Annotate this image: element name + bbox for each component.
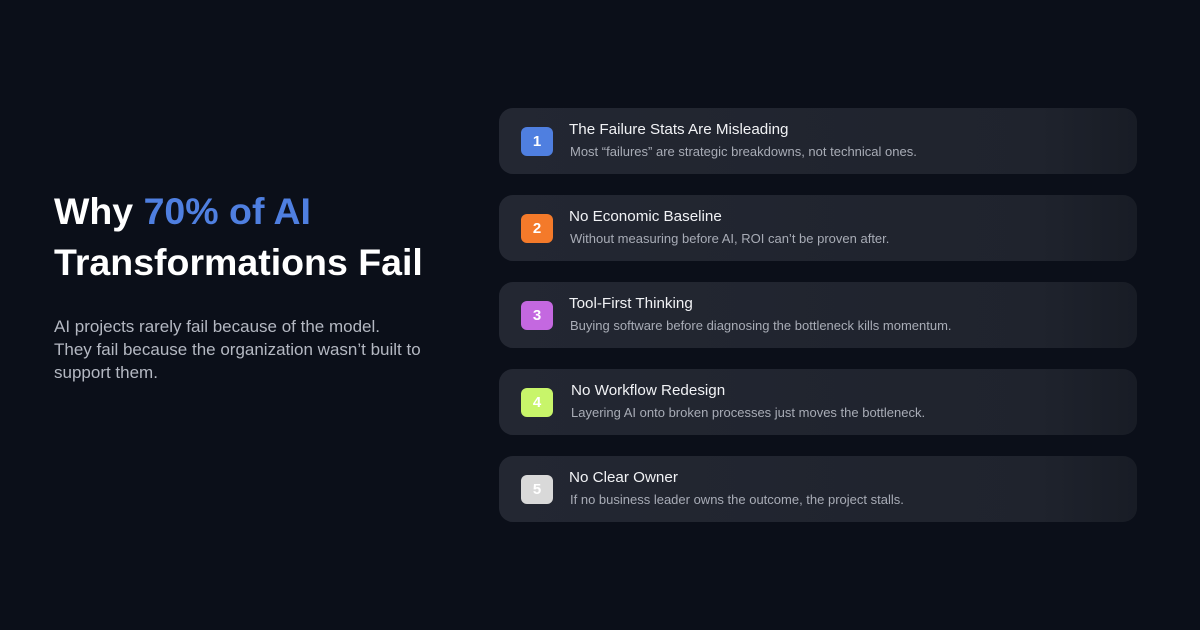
heading 4: No Workflow Redesign (571, 382, 725, 399)
badge 4 (521, 388, 553, 417)
desc 4: Layering AI onto broken processes just moves the bottleneck. (571, 405, 925, 420)
badge 5 (521, 475, 553, 504)
desc 1: Most “failures” are strategic breakdowns, not technical ones. (570, 144, 917, 159)
badge 5: 5 (533, 481, 541, 498)
badge 3 (521, 301, 553, 330)
heading 3: Tool-First Thinking (569, 295, 693, 312)
badge 2: 2 (533, 220, 541, 237)
badge 4: 4 (533, 394, 541, 411)
heading 2: No Economic Baseline (569, 208, 722, 225)
card 5 (499, 456, 1137, 522)
card 1 (499, 108, 1137, 174)
badge 3: 3 (533, 307, 541, 324)
subtitle text: AI projects rarely fail because of the model. (54, 317, 380, 336)
badge 1 (521, 127, 553, 156)
card 2 (499, 195, 1137, 261)
desc 2: Without measuring before AI, ROI can’t be proven after. (570, 231, 889, 246)
heading 5: No Clear Owner (569, 469, 678, 486)
subtitle text: They fail because the organization wasn’t built to support them. (54, 340, 421, 382)
desc 5: If no business leader owns the outcome, the project stalls. (570, 492, 904, 507)
desc 3: Buying software before diagnosing the bottleneck kills momentum. (570, 318, 952, 333)
badge 1: 1 (533, 133, 541, 150)
card 4 (499, 369, 1137, 435)
card 3 (499, 282, 1137, 348)
heading 1: The Failure Stats Are Misleading (569, 121, 788, 138)
title: Why 70% of AI (54, 190, 311, 232)
subtitle text (54, 317, 421, 382)
title: Transformations Fail (54, 241, 423, 283)
badge 2 (521, 214, 553, 243)
title (54, 190, 423, 283)
